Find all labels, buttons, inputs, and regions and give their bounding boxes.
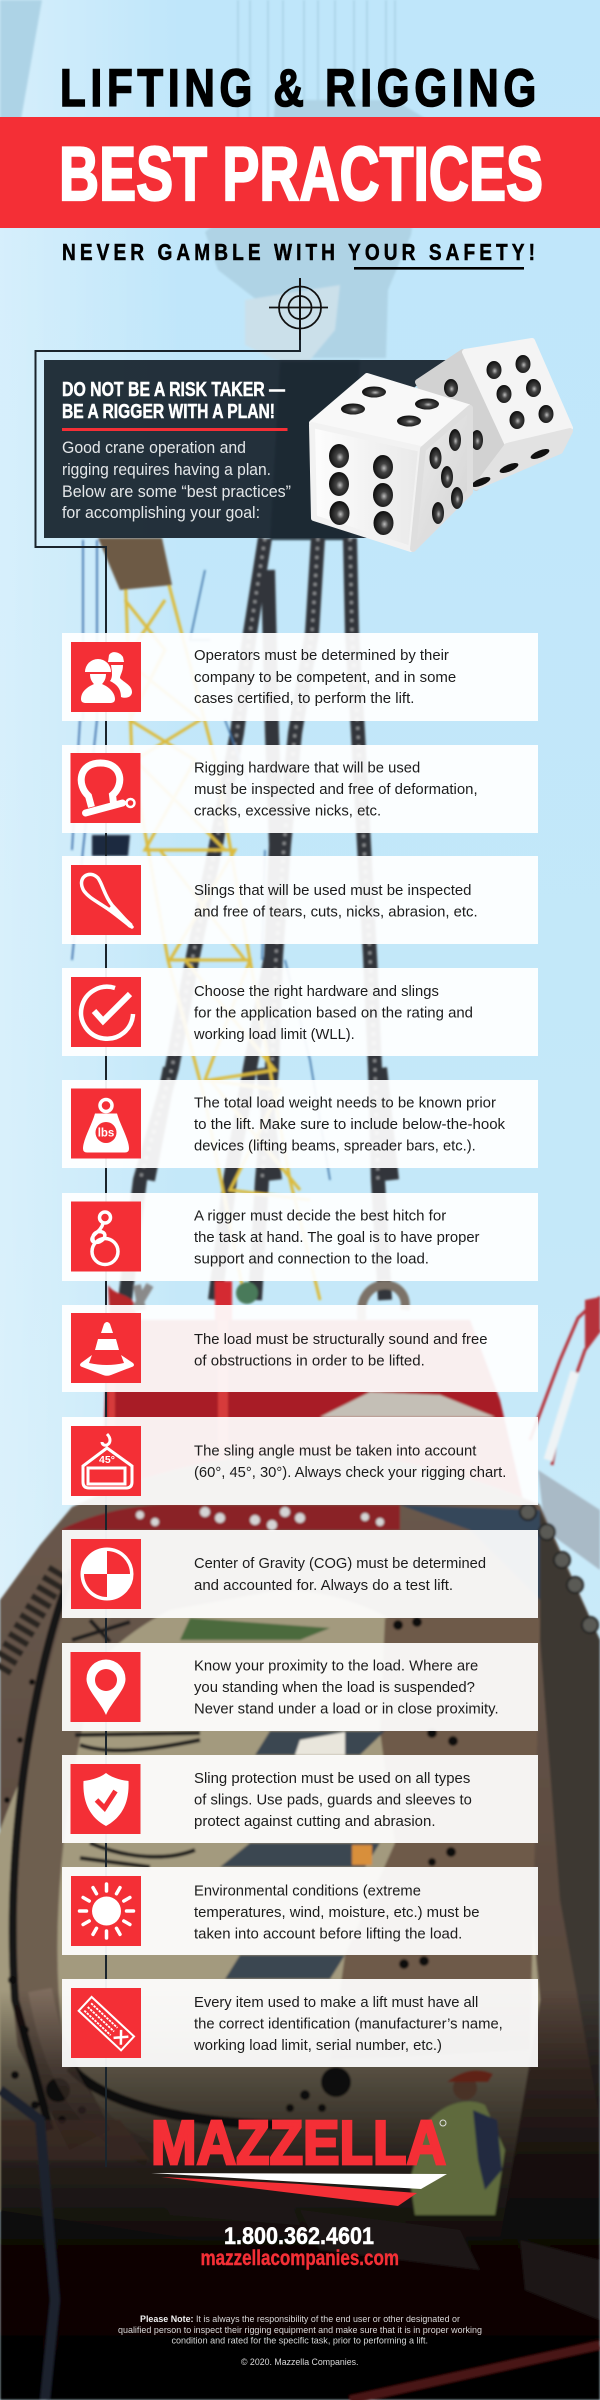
card text: the task at hand. The goal is to have proper [194,1230,480,1246]
card text [194,1444,506,1481]
card text [194,760,478,820]
intro paragraph: Good crane operation and [62,438,246,457]
icon: location pin [70,1652,140,1722]
bottom darkening [0,1990,600,2400]
card text [194,1208,480,1268]
card text [194,1884,480,1942]
worker [410,2102,505,2215]
safety note [118,2314,482,2368]
card 4: right hardware [62,968,538,1056]
intro heading: BE A RIGGER WITH A PLAN! [62,401,275,423]
red title band [0,117,600,228]
safety note: © 2020. Mazzella Companies. [241,2357,358,2368]
card text: of obstructions in order to be lifted. [194,1354,425,1370]
shackles [108,1285,136,1320]
logo: Mazzella [151,2109,447,2206]
contact website: mazzellacompanies.com [200,2247,399,2270]
contact phone: 1.800.362.4601 [224,2223,374,2250]
card text [194,1771,472,1830]
yellow lattice [125,570,320,1300]
red load [100,1320,530,1530]
icon: weight lbs: lbs [98,1128,114,1140]
intro panel: dark box [44,360,446,538]
icon: sling angle hook: 45° [99,1454,115,1466]
icon: workers with hard hats [71,642,141,712]
card text: devices (lifting beams, spreader bars, etc.). [194,1138,476,1154]
card text: temperatures, wind, moisture, etc.) must be [194,1905,480,1921]
icon: weight lbs [71,1088,141,1158]
card text: of slings. Use pads, guards and sleeves to [194,1792,472,1808]
card text: The total load weight needs to be known prior [194,1096,496,1112]
logo: Mazzella: MAZZELLA [151,2109,446,2178]
main ring body [0,1453,600,2400]
icon: shield with check [70,1764,140,1834]
card 11: sling protection [62,1755,538,1843]
icon: pair of dice [312,341,570,549]
card text: (60°, 45°, 30°). Always check your rigging chart. [194,1465,506,1481]
card text: support and connection to the load. [194,1252,429,1268]
card text: cracks, excessive nicks, etc. [194,804,381,820]
card text: The load must be structurally sound and free [194,1332,487,1348]
card text: Know your proximity to the load. Where are [194,1658,478,1674]
card text: working load limit, serial number, etc.) [193,2038,442,2054]
back die [418,341,570,489]
intro paragraph [62,438,291,522]
right crane lattice [530,1297,600,1440]
icon: sling angle hook [71,1426,141,1496]
ring details [0,1590,540,2240]
front die [312,376,470,549]
card text: Sling protection must be used on all types [194,1771,470,1787]
icon: traffic cone [71,1313,141,1383]
card 6: hitch [62,1193,538,1281]
safety note: Please Note: It is always the responsibility of the end user or other designated or [140,2314,460,2325]
safety note: condition and rated for the specific task, prior to performing a lift. [172,2336,428,2346]
icon: check in circle [71,977,141,1047]
intro paragraph: for accomplishing your goal: [62,503,260,522]
card text: you standing when the load is suspended? [194,1680,475,1696]
card text: protect against cutting and abrasion. [194,1814,436,1830]
icon: target crosshair [269,278,328,340]
steps [0,2120,150,2160]
card 1: operators [62,633,538,721]
card 8: sling angle [62,1417,538,1505]
card text: and accounted for. Always do a test lift. [194,1578,453,1594]
card text [194,1332,487,1370]
card text: cases certified, to perform the lift. [194,691,414,707]
card text: the correct identification (manufacturer’s name, [194,2016,503,2032]
card 7: load sound [62,1305,538,1392]
card text: Center of Gravity (COG) must be determined [194,1556,486,1572]
rigging block [98,538,172,590]
intro heading: DO NOT BE A RISK TAKER — [62,379,285,401]
icon: sling [71,865,141,935]
card 9: center of gravity [62,1530,538,1618]
icon: center of gravity [71,1539,141,1609]
card text [194,1556,486,1594]
card 2: rigging hardware [62,745,538,833]
icon: sun [71,1876,141,1946]
icon: shackle [70,753,140,823]
card 12: environmental conditions [62,1867,538,1955]
card text: Every item used to make a lift must have all [194,1995,478,2011]
card 10: proximity [62,1643,538,1731]
card text: and free of tears, cuts, nicks, abrasion, etc. [194,904,478,920]
ring holes [4,1617,458,2124]
card text [194,1658,499,1718]
card 5: load weight [62,1080,538,1168]
card text [194,1096,506,1154]
card text: The sling angle must be taken into account [194,1444,476,1460]
ropes [125,538,392,1300]
studs along the ring top [136,1507,384,1530]
card text: must be inspected and free of deformation, [194,782,478,798]
card text [194,883,478,920]
card text: A rigger must decide the best hitch for [194,1208,446,1224]
card text: Environmental conditions (extreme [194,1884,421,1900]
card text: to the lift. Make sure to include below-the-hook [194,1117,506,1133]
card text: working load limit (WLL). [193,1027,355,1043]
icon: identification tag [71,1988,141,2058]
card text [193,1995,503,2054]
card text: taken into account before lifting the load. [194,1926,462,1942]
card text [193,984,473,1043]
safety note: qualified person to inspect their rigging equipment and make sure that it is in proper working [118,2325,482,2336]
connector line from target around box and down behind cards [36,278,300,2167]
icon: hitch rings [71,1202,141,1272]
card text: Rigging hardware that will be used [194,760,420,776]
card text [194,648,456,707]
card text: Choose the right hardware and slings [194,984,439,1000]
intro paragraph: rigging requires having a plan. [62,460,271,479]
card text: company to be competent, and in some [194,670,456,686]
card 3: slings [62,856,538,944]
card 13: identification [62,1979,538,2067]
card text: for the application based on the rating and [194,1006,473,1022]
card text: Slings that will be used must be inspected [194,883,472,899]
card text: Never stand under a load or in close proximity. [194,1702,499,1718]
card text: Operators must be determined by their [194,648,449,664]
intro heading [62,379,285,423]
intro paragraph: Below are some “best practices” [62,482,291,501]
faint crane at top [0,0,42,125]
